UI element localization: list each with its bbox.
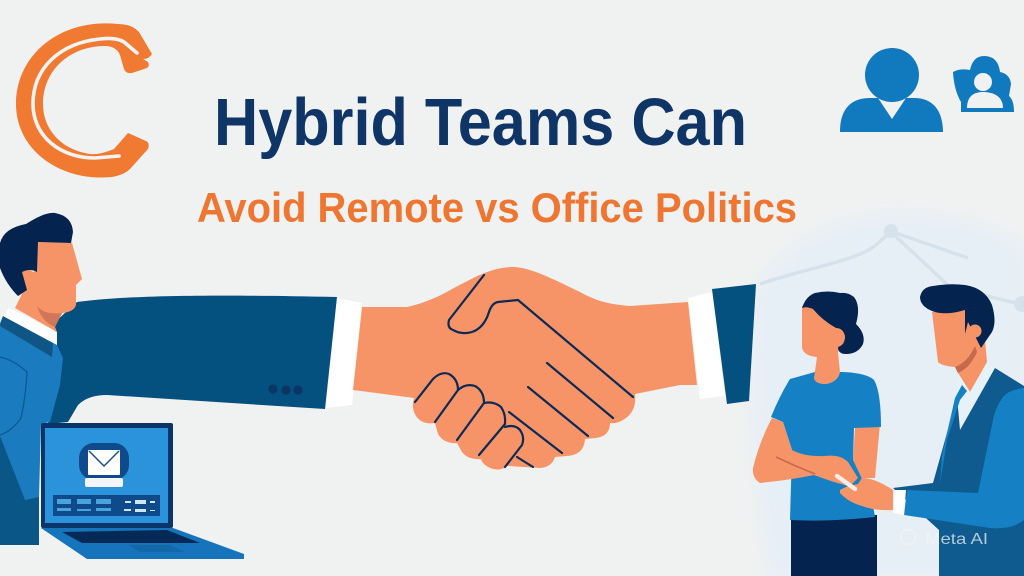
shirt [947, 363, 996, 433]
pants [791, 515, 877, 576]
laptop [41, 423, 244, 559]
hair [802, 292, 864, 354]
subtitle: Avoid Remote vs Office Politics [197, 184, 797, 231]
sleeve buttons [268, 384, 303, 395]
watermark: Meta AI [900, 530, 988, 548]
sleeve [904, 388, 1024, 528]
panel: light backdrop behind colleagues [751, 212, 1024, 576]
hands [353, 267, 697, 470]
cuff [893, 490, 906, 515]
woman [753, 292, 881, 576]
far arm [845, 424, 880, 478]
neck and face [932, 310, 987, 392]
icon: large user [840, 48, 943, 132]
sweater [0, 316, 63, 500]
right cuffs and sleeve [688, 284, 756, 404]
ear [968, 324, 982, 338]
man [837, 284, 1024, 576]
tie [940, 385, 967, 484]
neck and face [15, 242, 82, 332]
hair [0, 213, 73, 296]
laptop frame [41, 423, 173, 528]
title: Hybrid Teams Can [214, 85, 747, 160]
laptop base [41, 528, 244, 559]
dashboard strip [53, 495, 160, 516]
left person [0, 213, 337, 545]
hand [840, 478, 893, 510]
crossed arm [753, 418, 858, 486]
collar [3, 308, 57, 345]
icon: small user group [953, 56, 1014, 112]
neck and face [802, 306, 845, 384]
vest [893, 368, 1024, 576]
lower jacket [0, 420, 39, 545]
watermark: Meta AI: Meta AI [925, 531, 988, 548]
collar shadow [0, 316, 53, 357]
pen [837, 476, 855, 489]
shirt [771, 372, 881, 521]
arm: left sleeve [48, 296, 337, 424]
logo: orange C [16, 23, 152, 178]
laptop screen [45, 428, 168, 523]
handshake [326, 267, 697, 470]
finger lines [415, 275, 633, 467]
mail icon [79, 443, 129, 487]
hair [920, 284, 994, 348]
left cuff [326, 298, 362, 408]
